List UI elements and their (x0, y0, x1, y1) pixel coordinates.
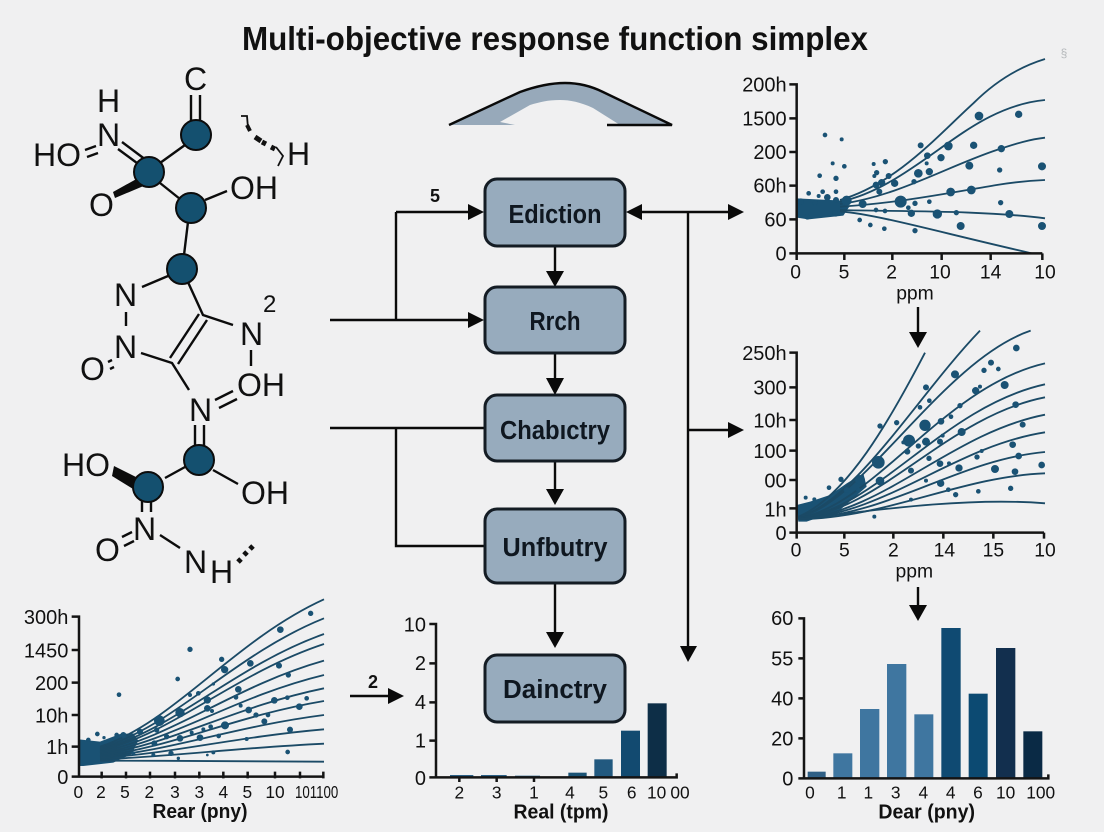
box: Dainctry: Dainctry (503, 676, 608, 704)
chart: bottom right bars: 6 (973, 782, 983, 802)
chart: top right scatter: 60 (764, 209, 787, 231)
faint corner mark: § (1061, 46, 1067, 60)
atom labels: OH (241, 475, 289, 511)
chart: bottom left scatter: 2 (96, 782, 106, 802)
chart: bottom centre bars: 4 (415, 692, 426, 714)
flow arrows (330, 204, 927, 704)
box: Rrch: Rrch (530, 308, 580, 336)
chart: bottom centre bars: 0 (415, 768, 426, 790)
hydrogen bond dots (247, 125, 250, 131)
atom labels: N (114, 329, 137, 365)
chart: bottom left scatter: 10h (35, 705, 68, 727)
atom labels: OH (237, 367, 285, 403)
atom labels: H (97, 83, 120, 119)
chart: bottom left scatter: 5 (243, 782, 252, 802)
chart: top right scatter: 60h (753, 176, 787, 198)
chart: bottom left scatter: 101100 (295, 782, 338, 802)
chart: bottom left scatter: 2 (145, 782, 154, 802)
chart: bottom right bars: 20 (771, 729, 793, 751)
chart: middle right scatter: 00 (764, 470, 787, 492)
atom labels: HO (62, 447, 110, 483)
atom nodes (133, 120, 214, 502)
chart: bottom left scatter: 200 (35, 673, 68, 695)
chart: bottom centre bars: 2 (415, 653, 426, 675)
chart: bottom left scatter: 0 (57, 767, 68, 789)
arrow label 5: 5 (430, 186, 440, 206)
chart: bottom left scatter: 300h (24, 607, 68, 629)
chart: middle right scatter: 2 (888, 541, 899, 562)
chart: middle right scatter: 10h (753, 410, 787, 432)
chart: bottom centre bars: 6 (627, 782, 636, 802)
chart: bottom right bars: 60 (771, 608, 793, 630)
chart: bottom right bars: 0 (805, 782, 815, 802)
chart: bottom right bars: 100 (1026, 782, 1055, 802)
chart: bottom left scatter (24, 599, 338, 823)
chart: middle right scatter: 300 (753, 378, 787, 400)
box: Rrch (485, 287, 625, 353)
simplex arch (449, 83, 672, 125)
atom labels: N (189, 392, 212, 428)
chart: bottom centre bars: 10 (647, 782, 666, 802)
chart: middle right scatter: 1h (764, 500, 787, 522)
title: Multi-objective response function simplex (242, 20, 869, 57)
chart: middle right scatter: 250h (742, 343, 787, 365)
box: Ediction (485, 179, 625, 246)
arrow label 2: 2 (368, 672, 378, 692)
chart: middle right scatter: 15 (983, 541, 1004, 562)
chart: bottom left scatter: 3 (170, 782, 180, 802)
chart: middle right scatter: 5 (839, 541, 850, 562)
chart: top right scatter: 5 (839, 263, 849, 284)
atom labels: 2 (263, 291, 276, 318)
chart: bottom left scatter: Rear (pny) (152, 801, 247, 823)
chart: bottom centre bars (404, 614, 690, 823)
chart: bottom centre bars: Real (tpm) (513, 801, 608, 823)
chart: bottom right bars: 10 (996, 782, 1015, 802)
chart: bottom centre bars: 2 (455, 782, 464, 802)
chart: bottom centre bars: 3 (492, 782, 501, 802)
atom labels: N (114, 277, 137, 313)
box: Chabıctry: Chabıctry (500, 417, 611, 445)
chart: bottom left scatter: 4 (219, 782, 229, 802)
chart: bottom centre bars: 00 (670, 782, 690, 802)
atom labels: O (80, 351, 105, 387)
chart: middle right scatter: 100 (753, 441, 787, 463)
chart: bottom centre bars: 1 (415, 730, 426, 752)
chart: top right scatter (742, 59, 1056, 304)
chart: middle right scatter: 14 (934, 541, 955, 562)
chart: bottom right bars: 1 (864, 782, 873, 802)
chart: top right scatter: ppm (896, 283, 934, 304)
chart: bottom left scatter: 1h (46, 737, 68, 759)
chart: bottom left scatter: 0 (74, 782, 83, 802)
chart: middle right scatter (742, 331, 1056, 582)
chart: bottom right bars: Dear (pny) (878, 801, 975, 823)
atom labels (33, 61, 310, 590)
chart: bottom centre bars: 10 (404, 614, 426, 636)
atom labels: O (95, 532, 120, 568)
chart: bottom centre bars: 4 (565, 782, 575, 802)
chart: top right scatter: 0 (790, 263, 801, 284)
chart: top right scatter: 10 (1034, 263, 1056, 284)
chart: middle right scatter: 0 (776, 523, 787, 545)
chart: bottom centre bars: 5 (599, 782, 608, 802)
chart: bottom right bars: 3 (891, 782, 900, 802)
atom labels: O (89, 187, 114, 223)
chart: bottom right bars: 4 (946, 782, 956, 802)
box: Dainctry (485, 655, 625, 722)
chart: bottom centre bars: 1 (529, 782, 539, 802)
chart: bottom right bars: 0 (782, 769, 793, 791)
box: Chabıctry (485, 395, 625, 461)
box: Unfbutry: Unfbutry (502, 534, 608, 562)
chart: middle right scatter: 0 (791, 541, 801, 562)
chart: bottom right bars: 40 (771, 689, 793, 711)
molecule diagram (33, 61, 310, 590)
chart: bottom right bars: 4 (919, 782, 929, 802)
atom labels: N (184, 544, 207, 580)
chart: bottom left scatter: 3 (195, 782, 204, 802)
atom labels: N (97, 117, 120, 153)
chart: top right scatter: 1500 (742, 108, 787, 130)
atom labels: OH (230, 170, 278, 206)
chart: bottom right bars: 1 (837, 782, 846, 802)
atom labels: H (210, 554, 233, 590)
chart: bottom right bars (771, 608, 1055, 823)
chart: bottom left scatter: 1450 (24, 640, 68, 662)
chart: bottom left scatter: 5 (120, 782, 130, 802)
chart: top right scatter: 2 (886, 263, 897, 284)
chart: top right scatter: 14 (980, 263, 1002, 284)
atom labels: C (184, 61, 207, 97)
chart: top right scatter: 200 (753, 142, 787, 164)
chart: bottom right bars: 55 (771, 649, 793, 671)
box: Unfbutry (485, 509, 625, 583)
chart: top right scatter: 10 (929, 263, 951, 284)
chart: middle right scatter: 10 (1034, 541, 1056, 562)
atom labels: N (133, 511, 156, 547)
chart: top right scatter: 200h (742, 75, 787, 97)
box: Ediction: Ediction (508, 201, 602, 229)
chart: middle right scatter: ppm (896, 561, 933, 582)
chart: bottom left scatter: 10 (265, 782, 285, 802)
chart: top right scatter: 0 (776, 243, 787, 265)
atom labels: HO (33, 137, 81, 173)
atom labels: H (287, 136, 310, 172)
atom labels: N (240, 316, 263, 352)
